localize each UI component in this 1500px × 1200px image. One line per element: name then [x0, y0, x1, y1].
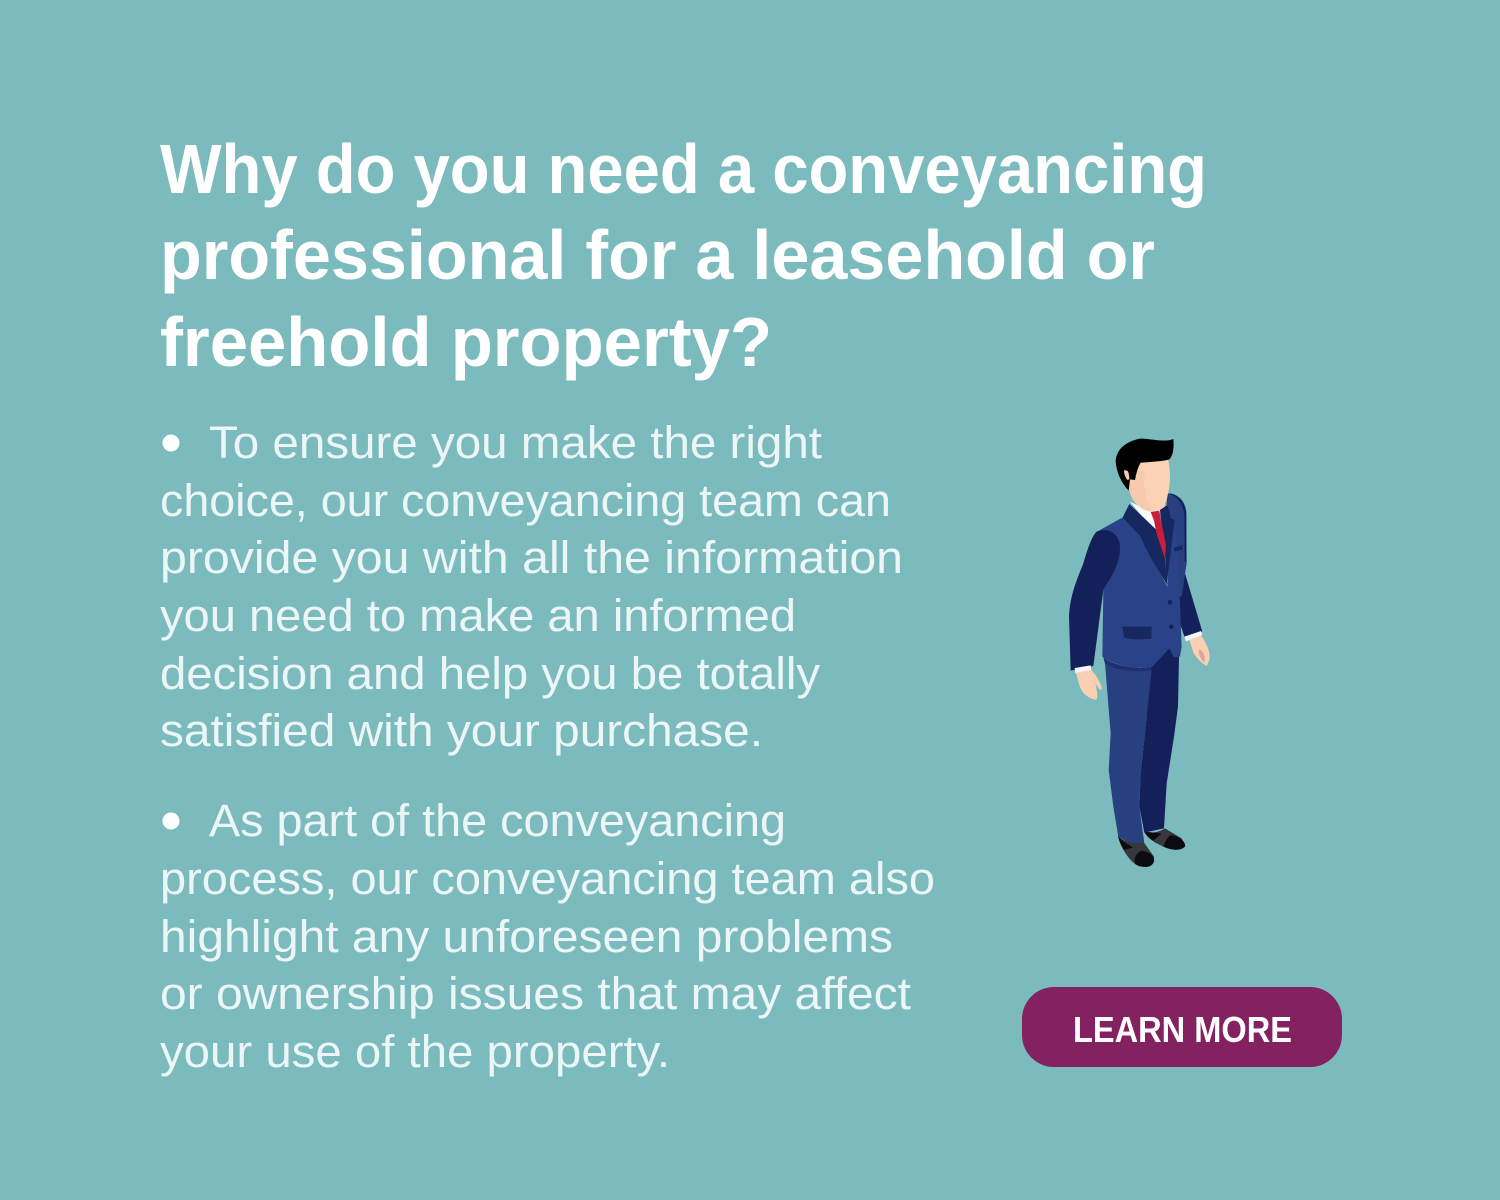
text block: second bullet — [160, 795, 935, 1077]
button: learn more — [1022, 987, 1342, 1067]
text block: first bullet: decision and help you be totally — [160, 648, 821, 699]
neck and shirt — [1132, 487, 1165, 513]
title: Why do you need a conveyancing — [160, 130, 1207, 208]
text block: first bullet: To ensure you make the right — [209, 417, 823, 468]
text block: second bullet: process, our conveyancing team also — [160, 853, 935, 904]
text block: first bullet: choice, our conveyancing team can — [160, 475, 891, 526]
text block: first bullet: satisfied with your purchase. — [160, 705, 763, 756]
far shoulder — [1165, 493, 1187, 597]
trousers: far leg — [1139, 640, 1179, 833]
text block: second bullet: or ownership issues that may affect — [160, 968, 912, 1019]
necktie — [1151, 511, 1166, 558]
hair — [1116, 439, 1174, 491]
lapels — [1123, 504, 1167, 585]
title: freehold property? — [160, 303, 772, 381]
jacket buttons — [1168, 600, 1172, 605]
near hand — [1076, 670, 1102, 700]
hip pocket — [1122, 627, 1152, 639]
shoe: far — [1144, 828, 1185, 847]
jacket torso — [1100, 508, 1182, 668]
title — [160, 130, 1207, 381]
title: professional for a leasehold or — [160, 216, 1155, 294]
text block: first bullet: you need to make an informed — [160, 590, 796, 641]
text block: second bullet: As part of the conveyancing — [209, 795, 786, 846]
breast pocket — [1174, 545, 1183, 552]
trousers: near leg — [1105, 663, 1152, 844]
text block: second bullet: your use of the property. — [160, 1026, 670, 1077]
text block: second bullet: highlight any unforeseen problems — [160, 911, 893, 962]
button: learn more: LEARN MORE — [1073, 1009, 1292, 1050]
text block: first bullet: provide you with all the information — [160, 532, 903, 583]
shoe: near — [1118, 836, 1154, 867]
head — [1124, 460, 1170, 512]
jacket hem — [1103, 657, 1152, 671]
near sleeve — [1069, 530, 1120, 671]
far hand — [1189, 635, 1210, 666]
far sleeve — [1178, 562, 1202, 638]
illustration: businessman in blue suit — [1069, 439, 1210, 867]
text block: first bullet — [160, 417, 903, 756]
